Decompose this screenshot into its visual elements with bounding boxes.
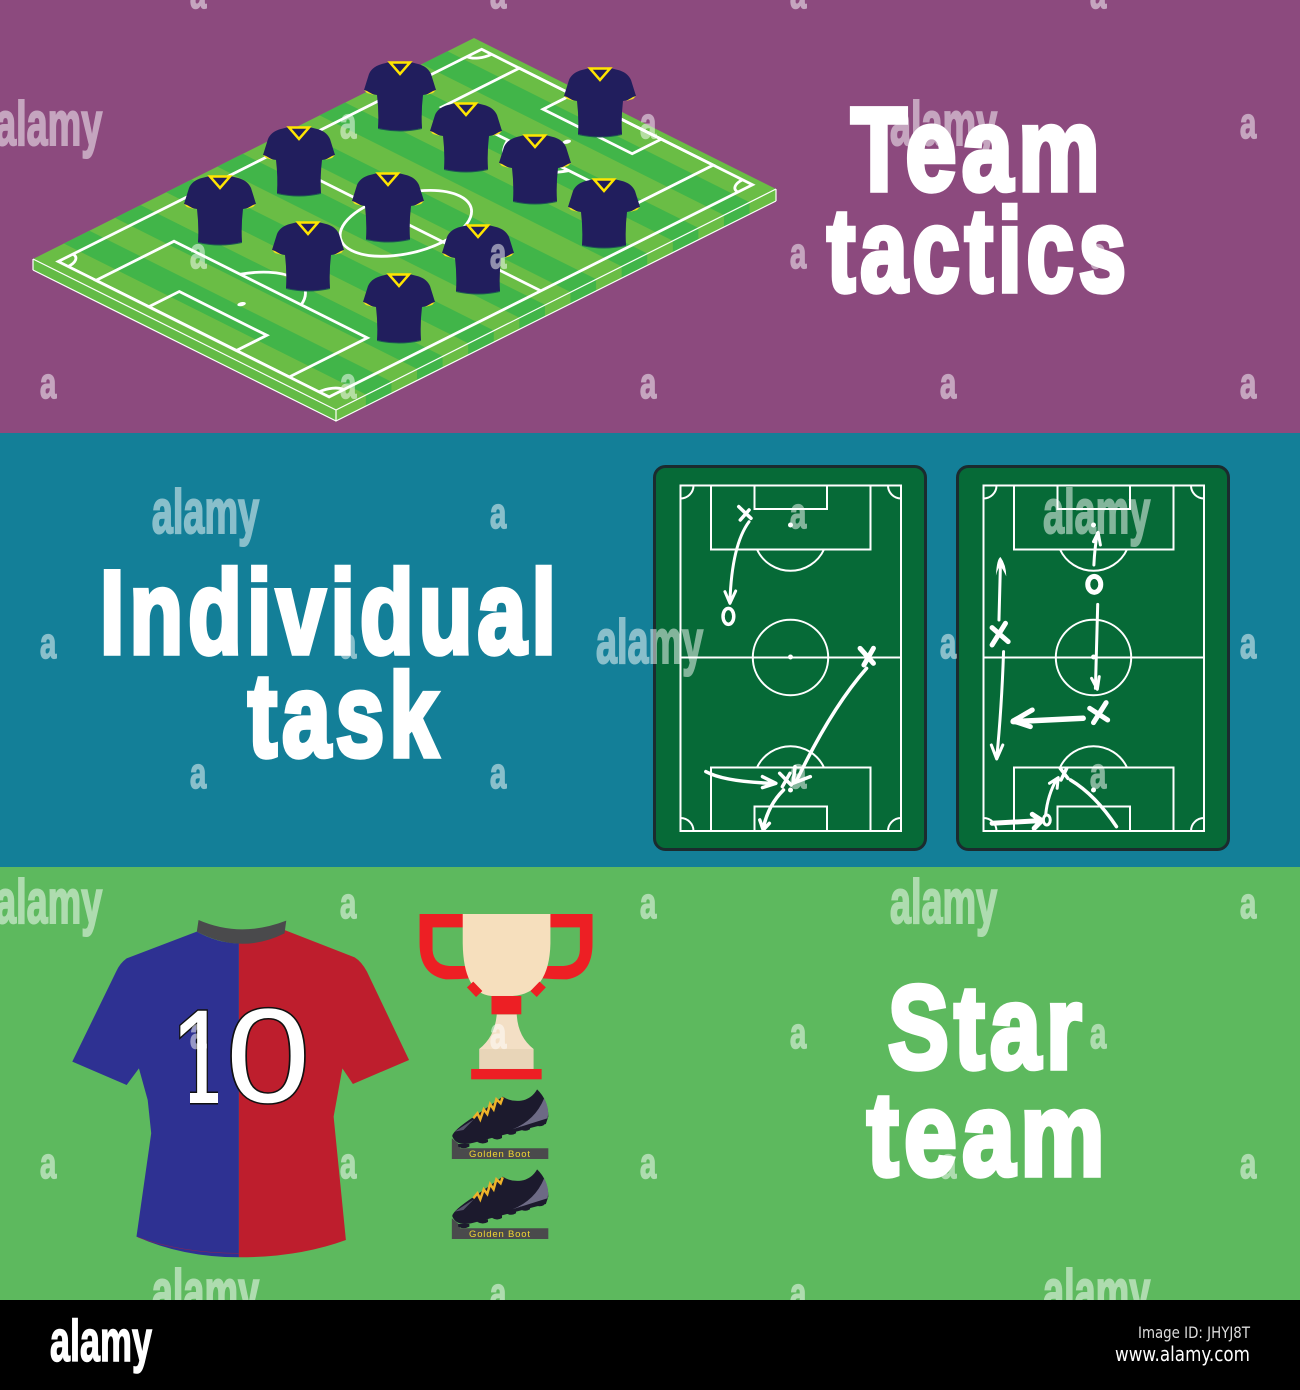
watermark overlay: alamy	[152, 477, 259, 546]
tactics board: left	[654, 466, 926, 850]
icon: golden boot 2: Golden Boot	[469, 1229, 530, 1240]
panel: star team	[0, 867, 1300, 1300]
jersey number: 0	[226, 982, 310, 1131]
jersey number	[179, 1006, 306, 1105]
watermark overlay: alamy	[152, 1257, 259, 1326]
icon: trophy	[420, 914, 593, 1079]
website: www.alamy.com	[1115, 1342, 1250, 1366]
number 10 jersey	[72, 920, 409, 1257]
watermark overlay: aaaa	[190, 748, 1107, 797]
watermark overlay: aaaaa	[40, 358, 1257, 407]
watermark overlay: aaaa	[190, 228, 1107, 277]
heading: team tactics: Team	[851, 84, 1105, 216]
heading: star team	[867, 962, 1110, 1201]
watermark overlay: aa	[490, 488, 807, 537]
icon: golden boot 1	[452, 1089, 548, 1160]
heading: individual task: Individual	[100, 547, 561, 679]
watermark overlay: alamy	[890, 89, 998, 158]
footer bar	[0, 1300, 1300, 1390]
watermark overlay: aaa	[340, 878, 1257, 927]
icon: golden boot 2	[452, 1169, 548, 1240]
jersey number: 1	[170, 983, 230, 1132]
heading: team tactics	[827, 84, 1131, 317]
watermark overlay: alamy	[1043, 1257, 1151, 1326]
chalk play diagram: right board	[991, 532, 1116, 828]
watermark overlay: alamy	[1043, 477, 1151, 546]
heading: star team: team	[867, 1069, 1110, 1201]
watermark overlay: aaaaa	[40, 1138, 1257, 1187]
watermark overlay: aaa	[340, 98, 1257, 147]
heading: star team: Star	[888, 962, 1087, 1094]
watermark overlay: aa	[490, 1268, 807, 1317]
panel: team tactics	[0, 0, 1300, 433]
panel: individual task	[0, 433, 1300, 867]
chalk play diagram: left board	[706, 507, 873, 830]
watermark overlay: alamy	[890, 867, 998, 936]
watermark overlay: aaaa	[40, 618, 1257, 667]
heading: individual task: task	[248, 650, 443, 782]
footer logo: alamy	[50, 1309, 152, 1374]
watermark overlay: alamy	[596, 607, 704, 676]
image id: Image ID: JHYJ8T	[1138, 1323, 1250, 1342]
isometric football pitch	[33, 38, 776, 422]
icon: golden boot 1: Golden Boot	[469, 1149, 530, 1160]
heading: team tactics: tactics	[827, 185, 1131, 317]
heading: individual task	[100, 547, 561, 782]
watermark overlay: aaaa	[190, 1008, 1107, 1057]
team formation shirts	[184, 62, 640, 344]
tactics board: right	[958, 466, 1228, 850]
